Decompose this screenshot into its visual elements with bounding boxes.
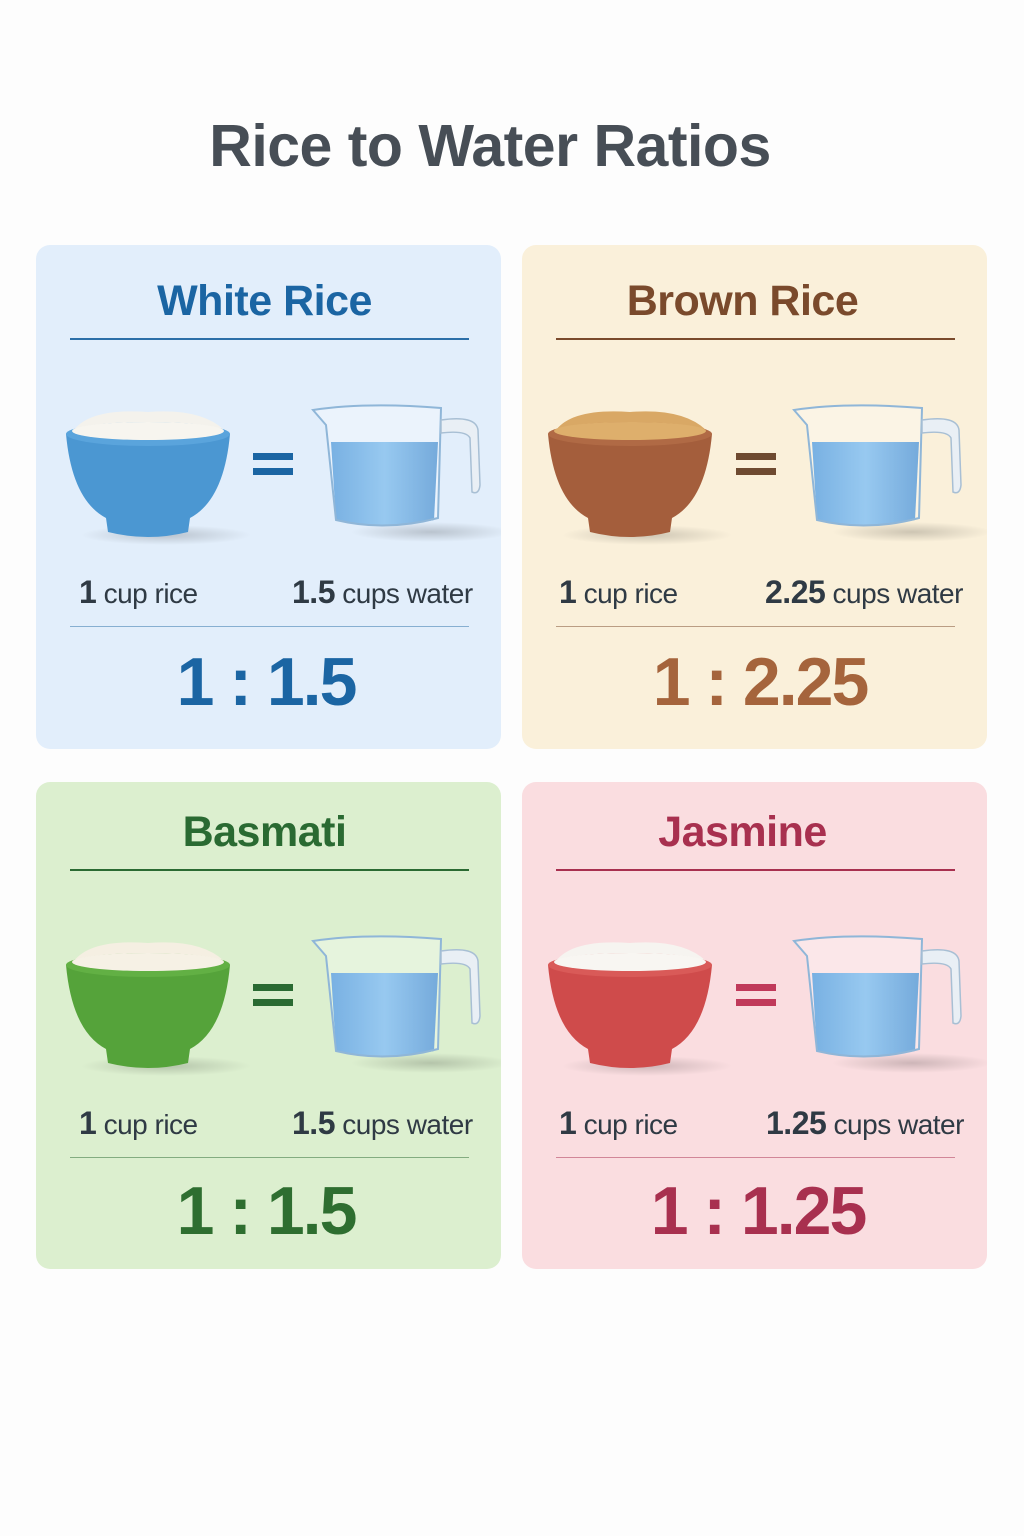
panel: basmati [36, 782, 501, 1269]
label: rice: 1 cup rice [559, 1105, 678, 1141]
label: rice: 1 cup rice [79, 574, 198, 610]
label: water: 1.5 cups water [292, 574, 473, 610]
heading: White Rice: White Rice [157, 277, 372, 325]
ratio: 1 : 1.5 [177, 1173, 355, 1249]
label: rice: 1 cup rice [559, 574, 678, 610]
illustration: bowl equals cup [66, 935, 495, 1074]
panel: jasmine [522, 782, 987, 1269]
heading: Basmati: Basmati [183, 808, 346, 856]
panel: brown rice [522, 245, 987, 749]
illustration: bowl equals cup [66, 404, 496, 543]
label: water: 1.25 cups water [766, 1105, 964, 1141]
illustration: bowl equals cup [548, 404, 977, 543]
ratio: 1 : 2.25 [653, 644, 867, 720]
label: water: 2.25 cups water [765, 574, 963, 610]
heading: Brown Rice: Brown Rice [627, 277, 858, 325]
label: water: 1.5 cups water [292, 1105, 473, 1141]
heading: Jasmine: Jasmine [658, 808, 827, 856]
ratio: 1 : 1.5 [177, 644, 355, 720]
label: rice: 1 cup rice [79, 1105, 198, 1141]
title: Rice to Water Ratios [209, 113, 771, 179]
panel: white rice [36, 245, 501, 749]
ratio: 1 : 1.25 [651, 1173, 865, 1249]
illustration: bowl equals cup [548, 935, 977, 1074]
